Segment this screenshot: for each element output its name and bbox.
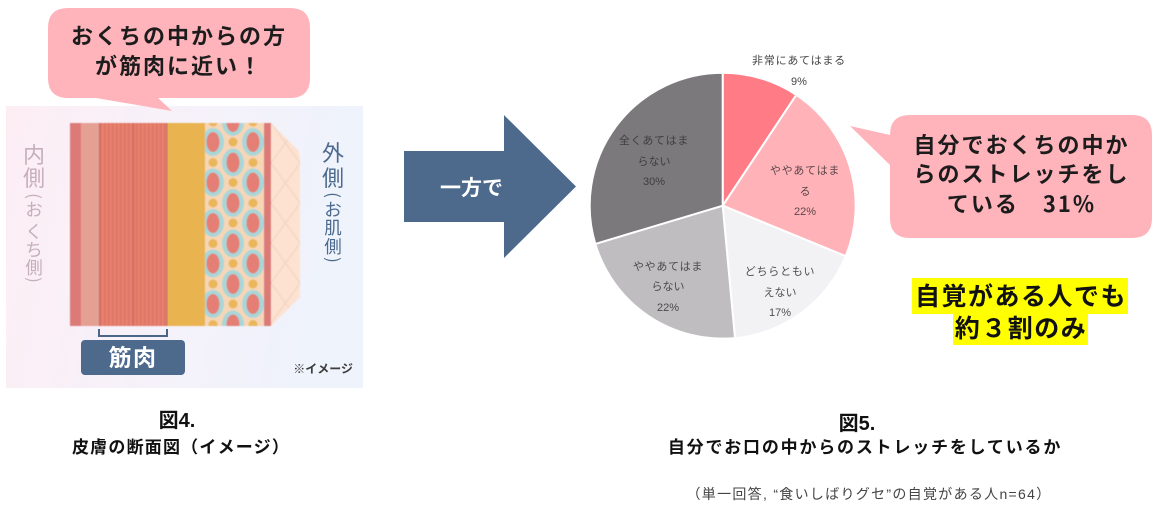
label: inner side: く xyxy=(25,219,43,244)
pie label: not at all true xyxy=(619,133,689,188)
caption: figure 4: 図4. xyxy=(159,410,195,432)
pie label: not at all true: 全くあてはま xyxy=(619,133,689,147)
skin layers diagram xyxy=(70,123,300,326)
pie label: not at all true: らない xyxy=(638,155,670,168)
pie label: very true xyxy=(752,54,846,88)
pie label: somewhat untrue: 22% xyxy=(657,302,679,314)
muscle label badge xyxy=(81,338,185,375)
pie label: somewhat untrue: ややあてはま xyxy=(633,260,703,273)
pie label: somewhat true: ややあてはま xyxy=(770,164,840,177)
pie label: somewhat true xyxy=(770,164,840,218)
pie label: not at all true: 30% xyxy=(643,176,665,188)
label: inner side: お xyxy=(25,197,43,222)
layer: mucosa xyxy=(70,123,81,326)
pie chart xyxy=(590,54,856,339)
label: outer side xyxy=(322,136,347,263)
label: outer side: 肌 xyxy=(324,215,342,240)
pie label: neither: どちらともい xyxy=(745,265,815,278)
pie label: somewhat untrue: らない xyxy=(652,280,684,293)
highlighted note: only about 30 percent: 約３割のみ xyxy=(955,309,1087,345)
slice: neither 17% xyxy=(723,206,846,338)
callout: stretching 31%: らのストレッチをし xyxy=(913,157,1130,189)
muscle bracket xyxy=(99,329,167,336)
label: outer side: 外 xyxy=(322,136,344,168)
layer: fat xyxy=(168,123,205,326)
callout: closer to muscle from inside the mouth: が筋肉に近い！ xyxy=(95,49,263,81)
slice: somewhat untrue 22% xyxy=(595,206,735,339)
label: outer side: ( xyxy=(322,192,347,198)
layer: muscle xyxy=(99,123,168,326)
label: inner side: ) xyxy=(23,277,48,283)
label: inner side xyxy=(23,138,48,283)
highlighted note: only about 30 percent xyxy=(912,277,1128,345)
sample note: （単一回答, “食いしばりグセ”の自覚がある人n=64） xyxy=(686,486,1052,502)
muscle label badge: 筋肉 xyxy=(108,338,158,372)
slice: not at all true 30% xyxy=(590,73,723,244)
slice: somewhat true 22% xyxy=(723,95,856,256)
layer: outer skin surface xyxy=(271,123,300,326)
pie label: somewhat true: る xyxy=(800,186,810,198)
label: inner side: 側 xyxy=(23,161,45,193)
caption: figure 4 xyxy=(72,410,290,457)
label: inner side: ( xyxy=(23,193,48,199)
caption: figure 5 xyxy=(668,413,1062,457)
layer: dermis xyxy=(205,123,264,326)
image note: ※イメージ xyxy=(293,360,353,377)
caption: figure 4: 皮膚の断面図（イメージ） xyxy=(72,437,290,457)
callout: closer to muscle from inside the mouth xyxy=(48,8,310,111)
arrow: on the other hand: 一方で xyxy=(440,172,503,202)
pie label: somewhat true: 22% xyxy=(794,206,816,218)
layer: submucosa xyxy=(81,123,99,326)
layer: epidermis xyxy=(264,123,271,326)
pie label: somewhat untrue xyxy=(633,260,703,314)
label: inner side: 側 xyxy=(25,255,43,280)
callout: closer to muscle from inside the mouth: おくちの中からの方 xyxy=(71,19,287,51)
label: outer side: お xyxy=(324,197,342,222)
pie label: neither: 17% xyxy=(769,307,791,319)
arrow: on the other hand xyxy=(404,115,576,258)
highlighted note: only about 30 percent: 自覚がある人でも xyxy=(915,277,1127,313)
label: inner side: 内 xyxy=(23,138,45,170)
label: outer side: 側 xyxy=(322,161,344,193)
pie label: neither: えない xyxy=(764,286,796,299)
slice: very true 9% xyxy=(723,73,796,206)
label: outer side: ) xyxy=(322,257,347,263)
pie label: very true: 9% xyxy=(791,76,807,88)
pie label: very true: 非常にあてはまる xyxy=(752,54,846,67)
pie label: neither xyxy=(745,265,815,319)
label: inner side: ち xyxy=(25,237,43,262)
caption: figure 5: 自分でお口の中からのストレッチをしているか xyxy=(668,437,1062,457)
panel: skin cross-section illustration xyxy=(6,106,363,388)
panel background xyxy=(6,106,363,388)
callout: stretching 31%: ている 31% xyxy=(947,187,1096,219)
callout: stretching 31% xyxy=(850,115,1152,238)
label: outer side: 側 xyxy=(324,234,342,259)
caption: figure 5: 図5. xyxy=(839,413,875,435)
callout: stretching 31%: 自分でおくちの中か xyxy=(913,128,1130,160)
